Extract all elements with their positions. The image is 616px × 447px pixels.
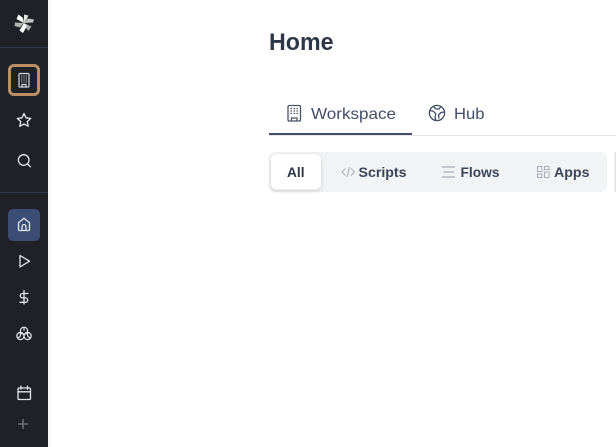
button: all [271, 154, 321, 190]
button: scripts: Scripts [358, 164, 407, 180]
icon: search [18, 155, 30, 167]
icon: logo pinwheel [14, 14, 34, 33]
icon: play [20, 256, 30, 267]
icon: star [17, 114, 31, 126]
icon: plus [18, 420, 28, 428]
icon: home active button [8, 209, 40, 241]
button: apps: Apps [554, 164, 590, 180]
icon: dollar [20, 290, 28, 304]
icon: calendar [18, 386, 30, 400]
button: all: All [287, 164, 304, 180]
title: Home [269, 29, 334, 56]
icon: workspace selected highlight [10, 66, 38, 94]
panel: sidebar [0, 0, 48, 447]
tab: workspace: Workspace [311, 106, 396, 123]
button: flows: Flows [460, 164, 500, 180]
tab: hub [429, 105, 485, 123]
next control edge [614, 152, 616, 192]
button: flows [442, 164, 500, 180]
panel: tab bar [269, 105, 616, 136]
tab: hub: Hub [454, 106, 485, 123]
panel: filter group [269, 152, 607, 192]
icon: resources cluster [17, 327, 31, 340]
button: apps [538, 164, 590, 180]
